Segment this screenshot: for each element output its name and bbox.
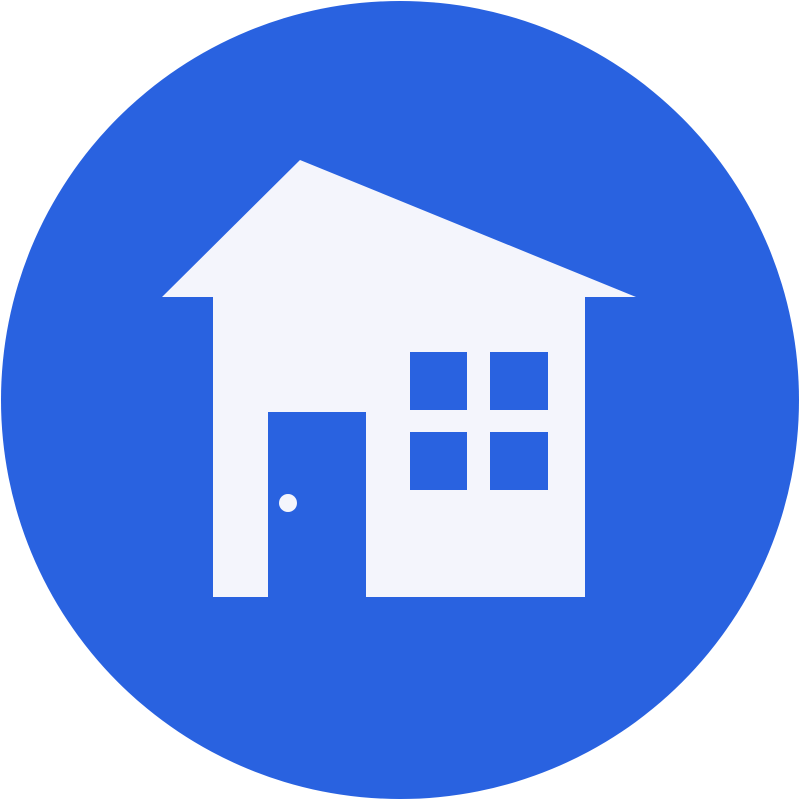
house [162,160,636,597]
doorknob [279,494,297,512]
house body with roof and door opening [162,160,636,597]
windows [410,352,548,490]
